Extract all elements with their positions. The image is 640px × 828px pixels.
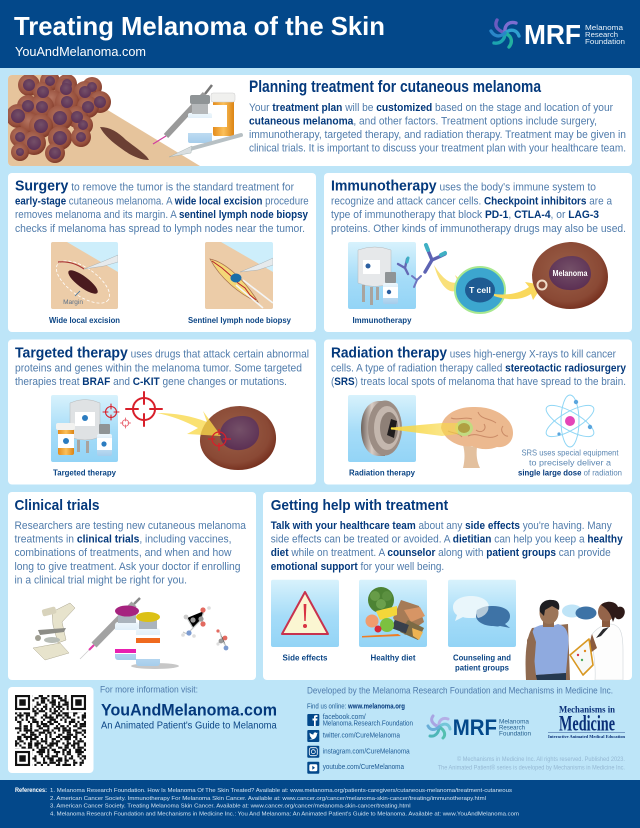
- logo: MRF footer: Research: [499, 724, 525, 731]
- illustration: sentinel lymph node biopsy: [205, 242, 273, 309]
- immunotherapy text: Immunotherapy uses the body's immune system to: [331, 179, 596, 195]
- patient: [526, 600, 570, 680]
- social links: [307, 704, 413, 774]
- body text: [249, 102, 626, 155]
- references footer: [0, 780, 640, 828]
- caption: Targeted therapy: [53, 468, 116, 478]
- illustration: wide local excision: Margin: [63, 299, 83, 306]
- radiation text: Radiation therapy uses high-energy X-rays to kill cancer: [331, 346, 616, 362]
- icon: antibodies: [398, 245, 445, 287]
- social links: facebook.com/: [323, 714, 366, 721]
- logo: Mechanisms in Medicine: [548, 705, 625, 739]
- panel: planning treatment: [6, 71, 632, 166]
- icon: molecules: [181, 606, 228, 650]
- radiation text: (SRS) treats local spots of melanoma that have spread to the brain.: [331, 376, 626, 388]
- radiation text: [331, 346, 626, 388]
- body text: Talk with your healthcare team about any side effects you're having. Many: [271, 520, 612, 532]
- more information block: For more information visit:: [100, 685, 198, 696]
- references footer: 4. Melanoma Research Foundation and Mechanisms in Medicine Inc.: You And Melanoma: An Animated Patient's Guide to Melanoma. Available at: www.YouAndMelanoma.com: [50, 811, 519, 817]
- caption: patient groups: [455, 663, 509, 673]
- T cell: [455, 267, 505, 313]
- body text: long to give treatment. Ask your doctor if enrolling: [14, 561, 241, 573]
- references footer: 2. American Cancer Society. Immunotherapy For Melanoma Skin Cancer. Available at: www.cancer.org/cancer/melanoma-skin-cancer/treating/immunotherapy.html: [50, 796, 486, 802]
- body text: Your treatment plan will be customized based on the stage and location of your: [249, 102, 613, 114]
- icon: tumor target: [208, 429, 231, 451]
- radiation text: cells. A type of radiation therapy called stereotactic radiosurgery: [331, 363, 626, 375]
- illustration: melanoma cells on skin: [6, 71, 241, 166]
- social links: youtube.com/CureMelanoma: [323, 764, 404, 771]
- illustration: wide local excision: [50, 242, 118, 311]
- heading: Getting help with treatment: [271, 498, 448, 514]
- SRS note: single large dose of radiation: [518, 468, 622, 478]
- caption: Healthy diet: [370, 653, 416, 663]
- logo: MRF header: [491, 19, 625, 50]
- illustration: IV bag and vial: [348, 242, 416, 309]
- caption: Counseling and: [453, 653, 511, 663]
- surgery text: checks if melanoma has spread to lymph nodes near the tumor.: [15, 223, 305, 235]
- caption: [453, 653, 511, 673]
- header banner: [0, 0, 640, 68]
- T cell: T cell: [469, 285, 491, 295]
- caption: Sentinel lymph node biopsy: [188, 315, 291, 325]
- brain: [441, 407, 513, 468]
- heading: Clinical trials: [14, 498, 100, 514]
- icon: counseling bubbles: [448, 580, 516, 647]
- logo: MRF footer: MRF: [453, 715, 497, 740]
- targeted text: Targeted therapy uses drugs that attack certain abnormal: [15, 346, 309, 362]
- immunotherapy text: recognize and attack cancer cells. Checkpoint inhibitors are a: [331, 196, 612, 208]
- body text: [271, 520, 623, 573]
- surgery text: removes melanoma and its margin. A sentinel lymph node biopsy: [15, 209, 308, 221]
- logo: MRF header: Melanoma: [585, 23, 624, 32]
- body text: diet while on treatment. A counselor along with patient groups can provide: [271, 547, 611, 559]
- clipboard: [570, 639, 593, 675]
- body text: emotional support for your well being.: [271, 561, 444, 573]
- icon: twitter: [307, 730, 319, 742]
- QR code: [8, 687, 94, 773]
- logo: MRF footer: Foundation: [499, 730, 531, 737]
- panel: targeted therapy: [8, 340, 316, 484]
- illustration: targeted drugs: [51, 395, 118, 462]
- targeted text: [15, 346, 309, 388]
- icon: side effects warning: [271, 580, 339, 647]
- caption: Wide local excision: [49, 315, 120, 325]
- surgery text: [15, 179, 309, 235]
- body text: treatments in clinical trials, including vaccines,: [14, 534, 232, 546]
- immunotherapy text: [331, 179, 626, 235]
- immunotherapy text: type of immunotherapy that block PD-1, CTLA-4, or LAG-3: [331, 209, 599, 221]
- icon: healthy diet: [359, 580, 427, 647]
- targeted text: proteins and genes within the melanoma tumor. Some targeted: [15, 363, 302, 375]
- social links: Melanoma.Research.Foundation: [323, 720, 413, 728]
- icon: instagram: [307, 746, 319, 758]
- arrow: T cell to melanoma: [494, 282, 543, 300]
- vial: [188, 95, 212, 143]
- targeted text: therapies treat BRAF and C-KIT gene changes or mutations.: [15, 376, 287, 388]
- body text: combinations of treatments, and when and how: [14, 547, 232, 559]
- icon: youtube: [307, 762, 319, 774]
- tagline: An Animated Patient's Guide to Melanoma: [101, 721, 277, 732]
- website link: YouAndMelanoma.com: [15, 44, 146, 59]
- SRS note: [518, 448, 622, 478]
- panel: immunotherapy: [324, 173, 632, 332]
- panel: getting help with treatment: [263, 492, 632, 680]
- body text: immunotherapy, targeted therapy, and radiation therapy. Treatment may be given in: [249, 129, 626, 141]
- logo: MRF header: Research: [585, 30, 618, 39]
- body text: side effects can be treated or avoided. A dietitian can help you keep a healthy: [271, 534, 623, 546]
- bottle: [211, 93, 235, 136]
- melanoma cell: Melanoma: [552, 269, 588, 278]
- references footer: 1. Melanoma Research Foundation. How Is Melanoma Of The Skin Treated? Available at: www.melanoma.org/patients-caregivers/cutaneous-melanoma/treatment-cutaneous: [50, 788, 512, 794]
- body text: [14, 520, 246, 586]
- more information block: [100, 685, 277, 732]
- icon: atom: [542, 395, 598, 447]
- icon: facebook: [307, 714, 319, 726]
- body text: in a clinical trial might be right for you.: [14, 574, 187, 586]
- panel: clinical trials: [8, 492, 256, 680]
- icon: syringe: [80, 598, 140, 659]
- melanoma tumor: [200, 406, 276, 470]
- immunotherapy text: proteins. Other kinds of immunotherapy drugs may also be used.: [331, 223, 626, 235]
- logo: MRF footer: [428, 715, 531, 740]
- illustration: patient and doctor: [526, 600, 625, 680]
- social links: twitter.com/CureMelanoma: [323, 732, 400, 739]
- logo: MRF header: MRF: [524, 19, 581, 50]
- melanoma cell: [532, 242, 608, 309]
- speech bubbles: [562, 604, 596, 620]
- arrow: drug to tumor: [157, 411, 221, 436]
- icon: microscope: [33, 603, 75, 660]
- radiation beam: [391, 423, 458, 436]
- references footer: 3. American Cancer Society. Treating Melanoma Skin Cancer. Available at: www.cancer.org/cancer/melanoma-skin-cancer/treating.html: [50, 804, 411, 810]
- title: Treating Melanoma of the Skin: [14, 11, 385, 41]
- social links: Find us online: www.melanoma.org: [307, 704, 405, 711]
- copyright: [438, 755, 625, 771]
- doctor: [589, 602, 625, 680]
- heading: Planning treatment for cutaneous melanoma: [249, 78, 542, 96]
- panel: surgery: [8, 173, 316, 332]
- panel: radiation therapy: [324, 340, 632, 484]
- references footer: References:: [15, 788, 47, 794]
- logo: MRF header: Foundation: [585, 37, 625, 46]
- surgery text: early-stage cutaneous melanoma. A wide local excision procedure: [15, 196, 309, 208]
- logo: Mechanisms in Medicine: Mechanisms in: [559, 705, 615, 715]
- syringe: [153, 85, 212, 144]
- website name: YouAndMelanoma.com: [101, 701, 277, 720]
- body text: cutaneous melanoma, and other factors. Treatment options include surgery,: [249, 116, 597, 128]
- SRS note: to precisely deliver a: [529, 458, 611, 468]
- social links: instagram.com/CureMelanoma: [323, 748, 410, 755]
- icon: crosshairs: [103, 392, 162, 428]
- arrow: antibody to T cell: [434, 265, 470, 295]
- SRS note: SRS uses special equipment: [522, 448, 619, 458]
- surgery text: Surgery to remove the tumor is the standard treatment for: [15, 179, 294, 195]
- caption: Side effects: [282, 653, 328, 663]
- caption: Radiation therapy: [349, 468, 415, 478]
- body text: Researchers are testing new cutaneous melanoma: [14, 520, 246, 532]
- illustration: radiation device: [348, 395, 416, 462]
- icon: vials: [115, 606, 179, 669]
- scalpel: [169, 135, 241, 157]
- body text: clinical trials. It is important to discuss your treatment plan with your healthcare team.: [249, 143, 626, 155]
- caption: Immunotherapy: [352, 315, 412, 325]
- logo: MRF footer: Melanoma: [499, 718, 529, 725]
- logo: Mechanisms in Medicine: Interactive Animated Medical Education: [548, 734, 625, 739]
